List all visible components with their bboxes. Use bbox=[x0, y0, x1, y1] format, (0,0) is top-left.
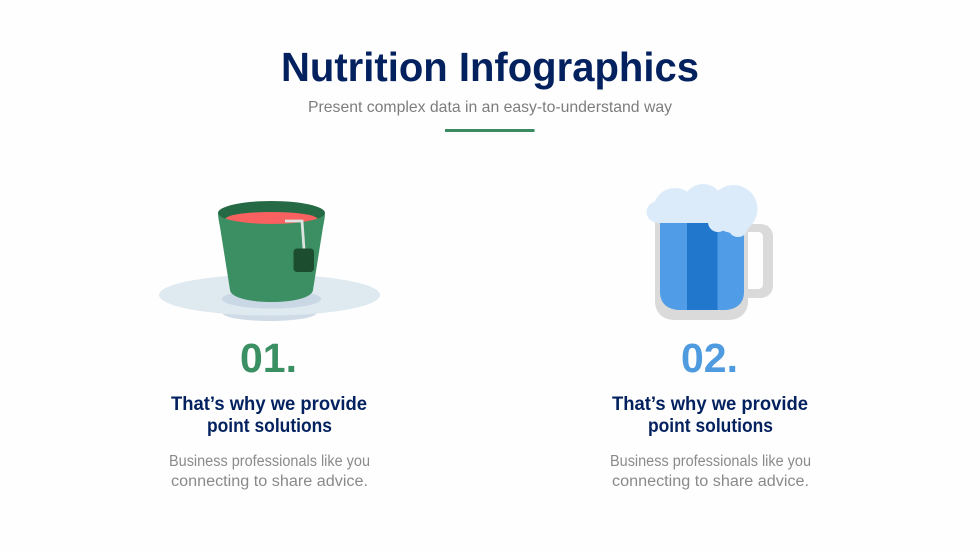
body text: Business professionals like you bbox=[169, 453, 370, 470]
heading: That’s why we provide bbox=[171, 394, 367, 415]
icon: beer mug with foam bbox=[646, 184, 773, 320]
body text: Business professionals like you bbox=[610, 453, 811, 470]
panel: tea: connecting to share advice. bbox=[171, 473, 368, 490]
panel: tea bbox=[159, 201, 380, 490]
subtitle: Present complex data in an easy-to-understand way bbox=[308, 99, 672, 116]
panel: tea: point solutions bbox=[207, 416, 332, 437]
title: Nutrition Infographics bbox=[281, 44, 699, 90]
panel: beer bbox=[610, 184, 811, 490]
icon: tea cup on saucer bbox=[159, 201, 380, 321]
title underline bbox=[445, 129, 534, 132]
number 01: 01. bbox=[240, 335, 297, 381]
panel: beer: connecting to share advice. bbox=[612, 473, 809, 490]
number 02: 02. bbox=[681, 335, 738, 381]
panel: beer: point solutions bbox=[648, 416, 773, 437]
heading: That’s why we provide bbox=[612, 394, 808, 415]
